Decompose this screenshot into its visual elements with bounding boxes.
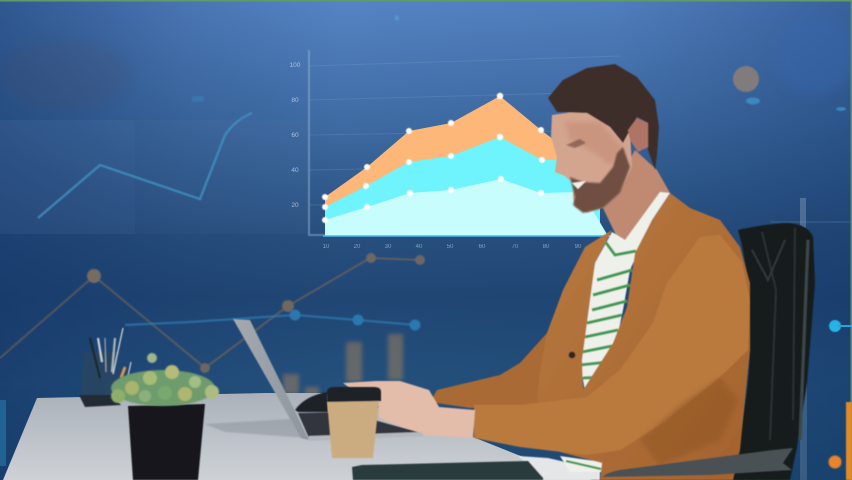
office chair — [733, 223, 815, 480]
shirt stripes — [580, 240, 636, 378]
x axis labels: 70 — [512, 244, 519, 250]
neck — [603, 150, 670, 250]
coffee cup — [327, 387, 381, 458]
y axis labels: 60 — [291, 132, 299, 139]
y axis labels: 40 — [291, 167, 299, 174]
chart gridlines — [310, 56, 620, 205]
cardigan button — [569, 352, 575, 358]
near sleeve — [474, 235, 750, 455]
y axis labels: 20 — [291, 202, 299, 209]
x axis labels: 80 — [543, 244, 550, 250]
area: orange — [325, 96, 600, 236]
desk — [3, 393, 592, 480]
x axis labels: 90 — [575, 244, 582, 250]
face — [551, 110, 632, 213]
ear — [628, 118, 648, 152]
y axis labels: 80 — [291, 97, 299, 104]
smile — [572, 181, 586, 189]
beard — [570, 147, 630, 213]
x axis labels: 40 — [416, 244, 423, 250]
y axis labels: 100 — [290, 62, 301, 69]
far sleeve — [430, 333, 585, 408]
baseline — [323, 235, 610, 237]
sleeve fold shadow — [640, 377, 738, 465]
area chart — [290, 50, 620, 250]
laptop lid — [233, 319, 309, 440]
cheek shadow — [565, 122, 625, 165]
x axis labels: 60 — [479, 244, 486, 250]
foliage — [111, 353, 219, 406]
laptop — [233, 319, 424, 441]
chart axes — [309, 50, 325, 235]
area: cyan — [325, 137, 600, 236]
background line chart: blue node line — [125, 310, 420, 330]
area: pale — [325, 179, 608, 236]
background line chart: left blue line — [38, 113, 252, 218]
mouse — [295, 392, 328, 412]
x axis labels: 10 — [323, 244, 330, 250]
man — [343, 64, 750, 480]
hand — [343, 381, 475, 438]
desk shadow — [205, 419, 307, 438]
faded orange bars — [283, 334, 403, 395]
laptop base — [298, 412, 421, 438]
x axis labels — [323, 244, 582, 250]
notebook — [352, 461, 543, 480]
x axis labels: 30 — [385, 244, 392, 250]
x axis labels: 20 — [354, 244, 361, 250]
eye — [566, 139, 586, 148]
paper under arm — [518, 456, 600, 480]
y axis labels — [290, 62, 301, 209]
cardigan body — [537, 193, 750, 480]
x axis labels: 50 — [447, 244, 454, 250]
pen holder — [79, 328, 131, 407]
t-shirt — [560, 192, 670, 472]
hair — [548, 64, 659, 170]
pot — [128, 404, 205, 480]
potted plant — [111, 353, 219, 480]
background line chart: orange line — [0, 253, 425, 373]
chair armrest — [602, 448, 793, 477]
data points — [322, 93, 545, 223]
